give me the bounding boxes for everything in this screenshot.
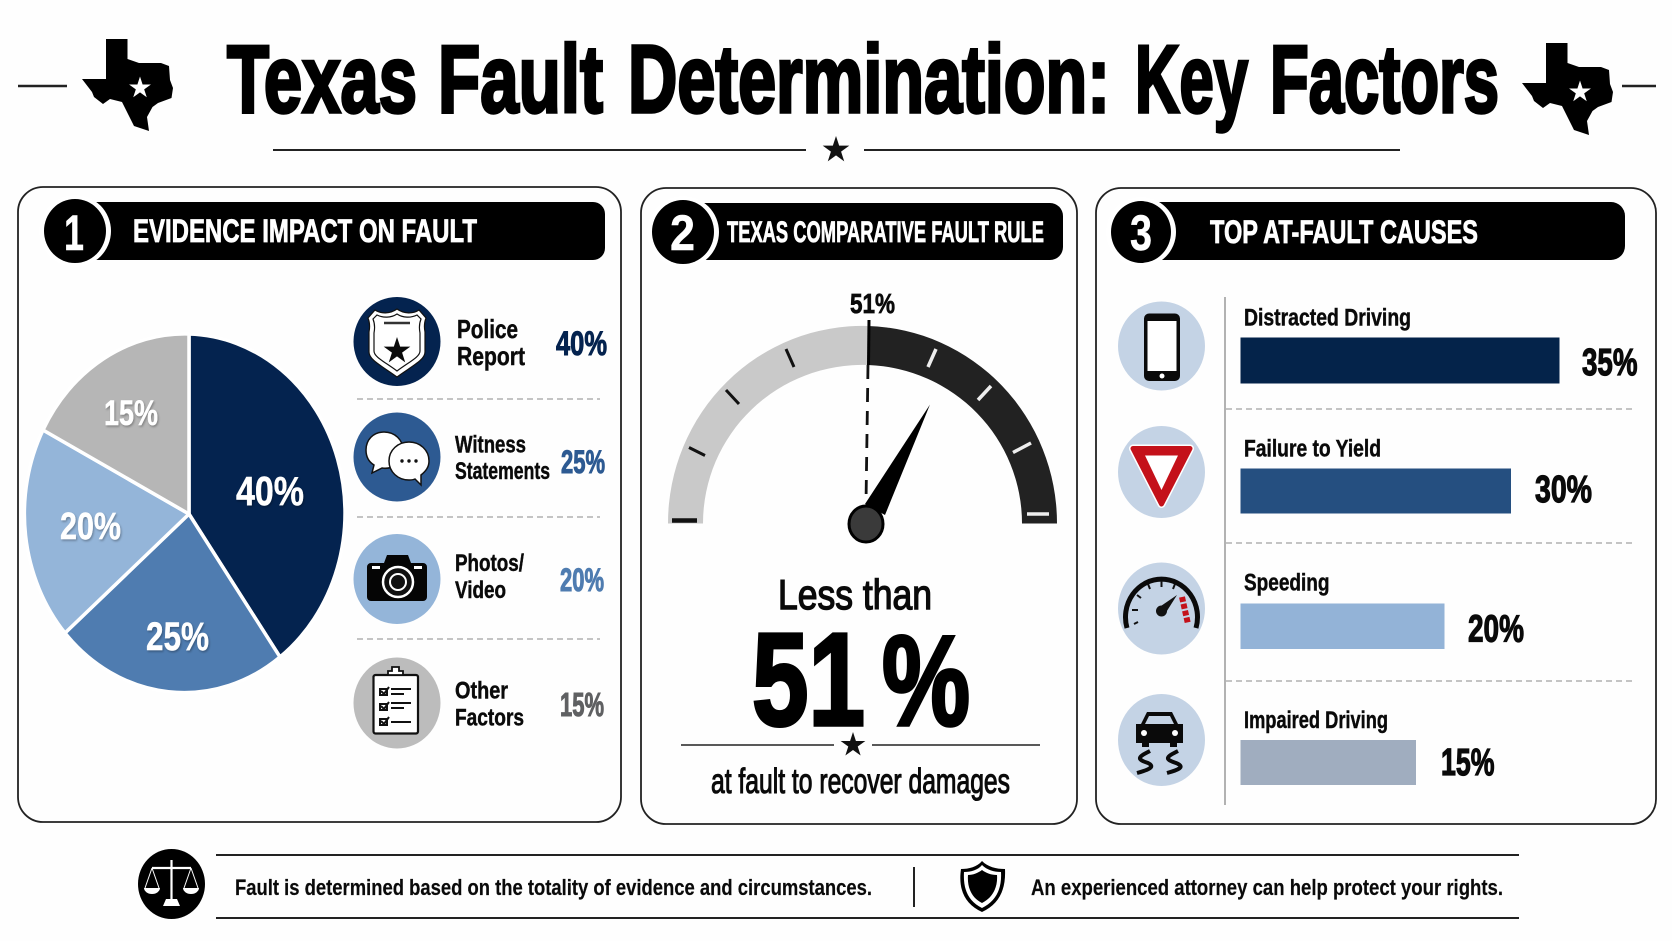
title: Determination: xyxy=(628,26,1110,133)
row: distracted driving: Distracted Driving xyxy=(1244,304,1411,332)
title: Factors xyxy=(1270,26,1499,133)
title: Fault xyxy=(438,26,603,133)
row: impaired driving: 15% xyxy=(1441,742,1494,784)
legend row: photos video xyxy=(354,534,604,624)
heading: comparative fault rule: 2 xyxy=(670,205,695,261)
legend row: photos video: 20% xyxy=(560,562,604,598)
row: impaired driving xyxy=(1118,694,1494,786)
legend row: witness statements: Statements xyxy=(455,458,550,485)
legend row: other factors: Factors xyxy=(455,704,524,732)
row: failure to yield: 30% xyxy=(1535,469,1592,511)
row: failure to yield xyxy=(1118,426,1592,518)
footer xyxy=(138,849,1519,919)
row: distracted driving xyxy=(1118,302,1638,390)
icon: scales of justice xyxy=(138,849,205,919)
row: speeding: Speeding xyxy=(1244,570,1330,596)
pie chart: 25% xyxy=(146,615,209,659)
legend row: photos video: Photos/ xyxy=(455,550,524,577)
icon: speedometer xyxy=(1118,562,1205,654)
heading: top causes: 3 xyxy=(1130,205,1152,261)
panel: top at-fault causes xyxy=(1096,188,1656,824)
icon: shield xyxy=(960,861,1005,912)
legend row: photos video: Video xyxy=(455,577,506,604)
icon: Texas left xyxy=(82,39,173,131)
title xyxy=(227,26,1499,133)
title: Key xyxy=(1135,26,1248,133)
legend row: other factors: 15% xyxy=(560,686,604,723)
big number: 51% xyxy=(752,606,970,753)
pie chart: 40% xyxy=(236,468,304,514)
pie chart xyxy=(24,334,345,693)
icon: phone xyxy=(1118,302,1205,390)
gauge xyxy=(668,288,1057,542)
pie chart: 15% xyxy=(104,394,158,433)
row: impaired driving: Impaired Driving xyxy=(1244,707,1388,734)
legend row: witness statements: 25% xyxy=(561,444,605,480)
heading: evidence impact: EVIDENCE IMPACT ON FAULT xyxy=(133,213,477,249)
divider with star xyxy=(681,732,1040,756)
legend row: police report: Report xyxy=(457,341,525,371)
text: less than: Less than xyxy=(778,571,932,618)
row: distracted driving: 35% xyxy=(1582,342,1638,384)
icon: skidding car xyxy=(1118,694,1205,786)
heading: evidence impact: 1 xyxy=(64,205,84,261)
legend row: police report xyxy=(354,297,607,386)
text: at fault to recover damages: at fault to recover damages xyxy=(711,762,1010,801)
gauge: 51% xyxy=(850,288,895,319)
heading: comparative fault rule xyxy=(647,196,1063,268)
heading: comparative fault rule: TEXAS COMPARATIVE FAULT RULE xyxy=(727,216,1044,249)
row: failure to yield: Failure to Yield xyxy=(1244,436,1381,462)
title block xyxy=(18,26,1656,161)
legend row: police report: 40% xyxy=(556,325,607,363)
row: speeding xyxy=(1118,562,1524,654)
icon: yield sign xyxy=(1118,426,1205,518)
panel: evidence impact on fault xyxy=(18,187,621,822)
title: Texas xyxy=(227,26,417,133)
legend row: police report: Police xyxy=(457,314,518,344)
heading: evidence impact xyxy=(39,195,605,267)
legend row: witness statements xyxy=(354,412,605,502)
text: attorney: An experienced attorney can help protect your rights. xyxy=(1031,875,1503,900)
icon: Texas right xyxy=(1522,43,1613,135)
pie chart: 20% xyxy=(60,506,121,548)
icon: title star xyxy=(823,136,849,161)
legend row: other factors: Other xyxy=(455,678,508,704)
heading: top causes xyxy=(1106,197,1625,267)
big number: 51%: % xyxy=(882,610,970,753)
legend row: other factors xyxy=(354,658,604,748)
heading: top causes: TOP AT-FAULT CAUSES xyxy=(1210,214,1478,250)
panel: Texas comparative fault rule xyxy=(641,188,1077,824)
big number: 51%: 51 xyxy=(752,606,865,753)
text: totality of evidence: Fault is determined based on the totality of evidence and circumstances. xyxy=(235,875,872,900)
legend row: witness statements: Witness xyxy=(455,432,526,458)
row: speeding: 20% xyxy=(1468,608,1524,650)
